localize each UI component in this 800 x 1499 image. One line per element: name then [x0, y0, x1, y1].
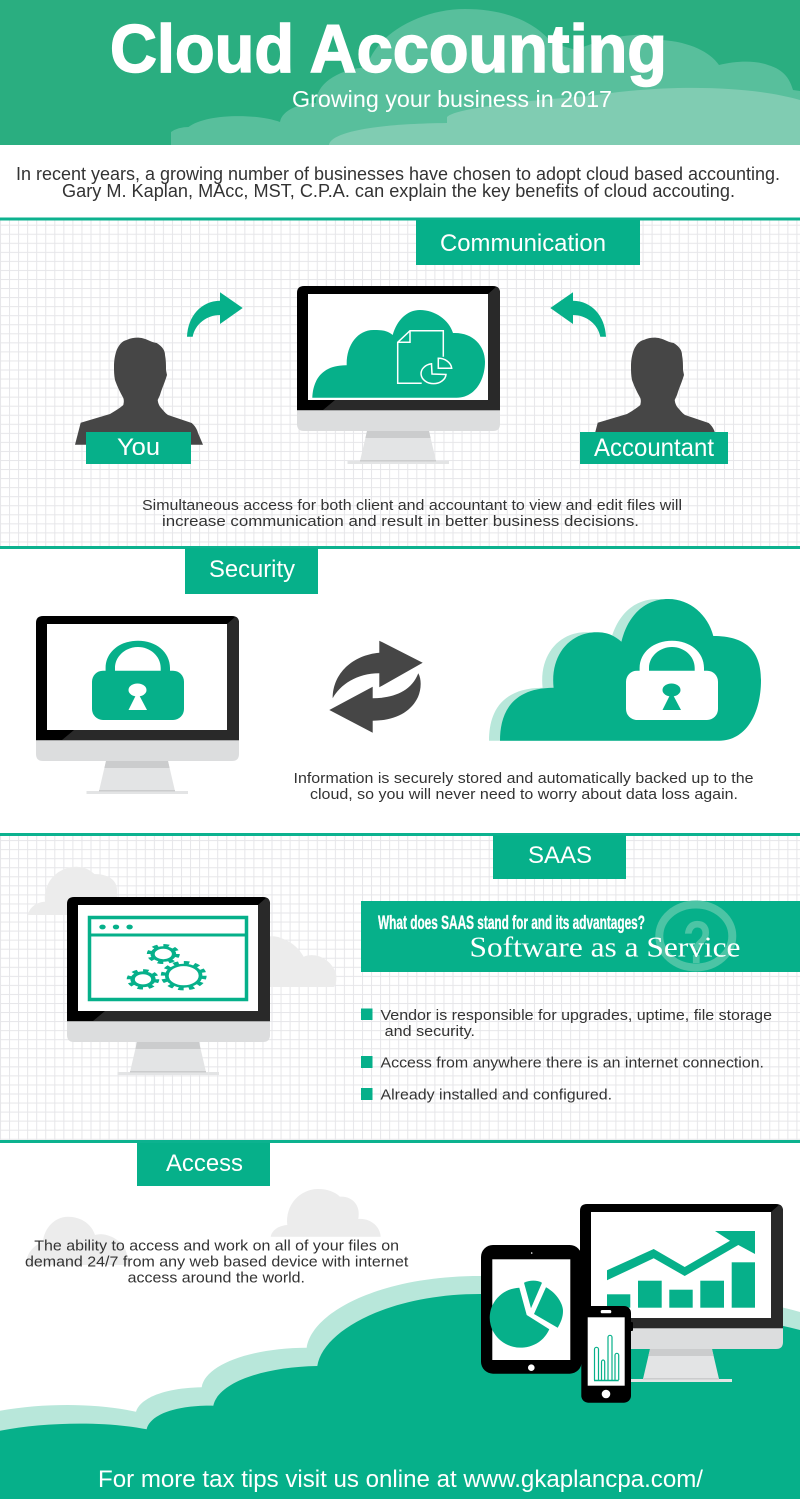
icon: monitor with growth chart [580, 1204, 783, 1382]
footer cloud: light layer [0, 1276, 800, 1499]
heading: saas [493, 835, 626, 879]
text: communication description: increase communication and result in better business decisions. [162, 513, 639, 530]
list: saas advantages: Already installed and configured. [380, 1086, 612, 1104]
icon: question mark ring: ? [683, 909, 712, 976]
text: security description: cloud, so you will never need to worry about data loss again. [310, 786, 738, 803]
footer call to action: For more tax tips visit us online at www.gkaplancpa.com/ [98, 1466, 703, 1493]
text: access description: demand 24/7 from any web based device with internet [25, 1254, 409, 1271]
subtitle: Growing your business in 2017 [292, 86, 612, 112]
arrow: you to cloud [187, 292, 243, 337]
label: you: You [117, 434, 160, 461]
heading: security: Security [209, 556, 295, 583]
icon: background cloud left [28, 867, 117, 915]
icon: sync arrows [329, 641, 423, 733]
text: access description: access around the world. [128, 1270, 305, 1287]
icon: background cloud a [26, 1217, 128, 1265]
icon: monitor with padlock [36, 616, 239, 794]
icon: background cloud b [271, 1189, 381, 1237]
icon: tablet with pie chart [481, 1245, 582, 1374]
text: security description [294, 770, 754, 803]
list: saas advantages: and security. [385, 1023, 475, 1040]
banner: what does saas stand for [361, 901, 800, 976]
list: saas advantages: Access from anywhere there is an internet connection. [380, 1054, 764, 1072]
text: security description: Information is securely stored and automatically backed up to the [294, 770, 754, 787]
banner answer: Software as a Service [470, 932, 740, 964]
icon: monitor with cloud file [297, 286, 500, 464]
heading: saas: SAAS [528, 842, 592, 869]
heading: access: Access [166, 1150, 243, 1177]
heading: security [185, 548, 318, 594]
text: access description [25, 1238, 409, 1287]
title: Cloud Accounting [110, 11, 667, 87]
intro text: In recent years, a growing number of businesses have chosen to adopt cloud based accounting. [16, 164, 780, 184]
icon: person you [75, 338, 203, 464]
header cloud: light tone [329, 88, 800, 145]
panel: security [36, 548, 761, 803]
heading: access [137, 1143, 270, 1186]
intro text: Gary M. Kaplan, MAcc, MST, C.P.A. can explain the key benefits of cloud accouting. [62, 181, 735, 201]
icon: background cloud right [250, 936, 336, 987]
panel: header banner [0, 0, 800, 145]
text: communication description [142, 497, 682, 530]
panel: communication [75, 220, 728, 530]
icon: cloud with padlock [489, 599, 761, 741]
icon: phone with bar chart [581, 1306, 633, 1403]
icon: person accountant [580, 338, 728, 464]
header cloud: mid tone [171, 9, 800, 145]
panel: saas [28, 835, 800, 1104]
arrow: accountant to cloud [550, 292, 606, 337]
list: saas advantages [361, 1007, 772, 1104]
text: access description: The ability to access and work on all of your files on [34, 1238, 399, 1255]
heading: communication [416, 220, 640, 265]
list: saas advantages: Vendor is responsible for upgrades, uptime, file storage [380, 1007, 772, 1024]
label: accountant: Accountant [594, 434, 714, 462]
panel: access [0, 1143, 800, 1499]
icon: question mark ring [659, 904, 732, 976]
text: communication description: Simultaneous access for both client and accountant to view and edit files will [142, 497, 682, 514]
footer cloud: green layer [0, 1294, 800, 1499]
heading: communication: Communication [440, 230, 606, 257]
icon: monitor with settings window [67, 897, 270, 1075]
intro text [16, 164, 780, 201]
